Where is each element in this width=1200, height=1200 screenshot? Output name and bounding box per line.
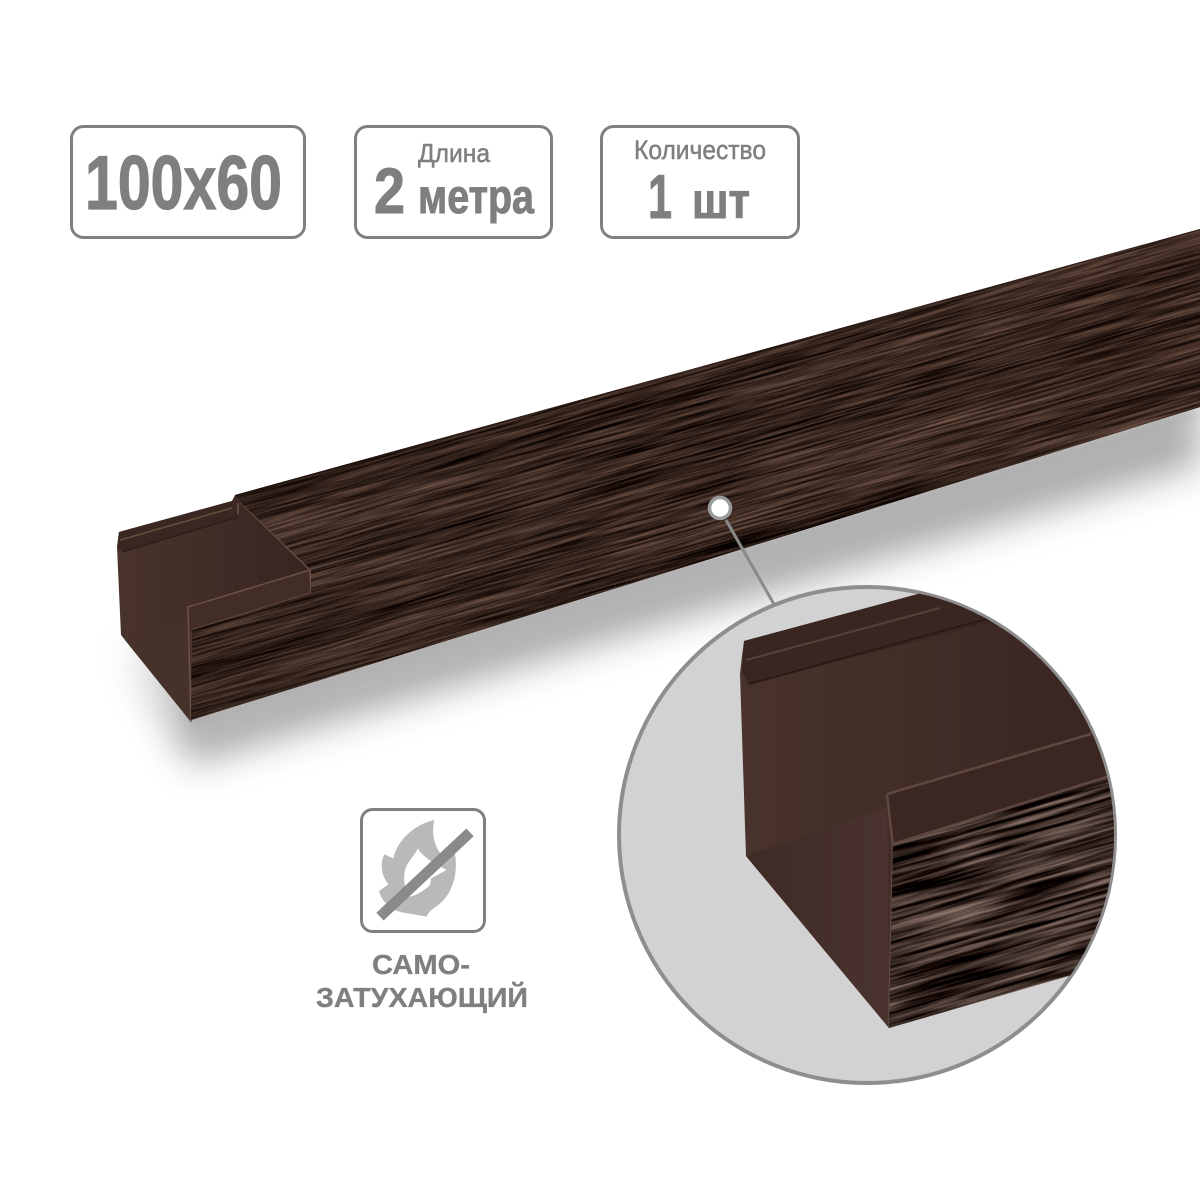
wood-textured body: [191, 229, 1200, 720]
product shadow: [125, 400, 1200, 765]
label: self-extinguishing: [316, 949, 528, 1013]
label: self-extinguishing: САМО-: [372, 949, 470, 980]
connector: pointer line from product to zoom circle: [726, 520, 775, 606]
badge: length 2 metres: Длина: [418, 138, 491, 168]
badge: size 100x60: [72, 126, 304, 238]
icon: self-extinguishing flame: [362, 810, 484, 932]
open channel end: [117, 495, 311, 722]
product: cable channel with wood finish: [117, 229, 1200, 780]
badge: quantity 1 piece: 1: [648, 163, 672, 232]
badge: length 2 metres: 2: [374, 155, 405, 227]
badge: length 2 metres: метра: [418, 171, 534, 224]
badge: quantity 1 piece: шт: [692, 173, 750, 229]
close-up: wood face: [889, 779, 1114, 1028]
label: self-extinguishing: ЗАТУХАЮЩИЙ: [316, 981, 528, 1013]
flame shape: [379, 820, 456, 917]
badge: length 2 metres: [356, 126, 552, 238]
marker: white dot on product: [710, 498, 730, 518]
close-up: lid front: [1092, 734, 1108, 778]
slash: [380, 832, 470, 917]
close-up: floor: [746, 852, 889, 1028]
badge: quantity 1 piece: Количество: [634, 135, 766, 165]
badge: size 100x60: 100x60: [85, 141, 282, 226]
close-up: profile ridges: [742, 592, 1000, 684]
close-up: inner wall: [740, 590, 1130, 1028]
zoom circle: channel end close-up: [617, 585, 1117, 1085]
badge: quantity 1 piece: [602, 126, 798, 238]
